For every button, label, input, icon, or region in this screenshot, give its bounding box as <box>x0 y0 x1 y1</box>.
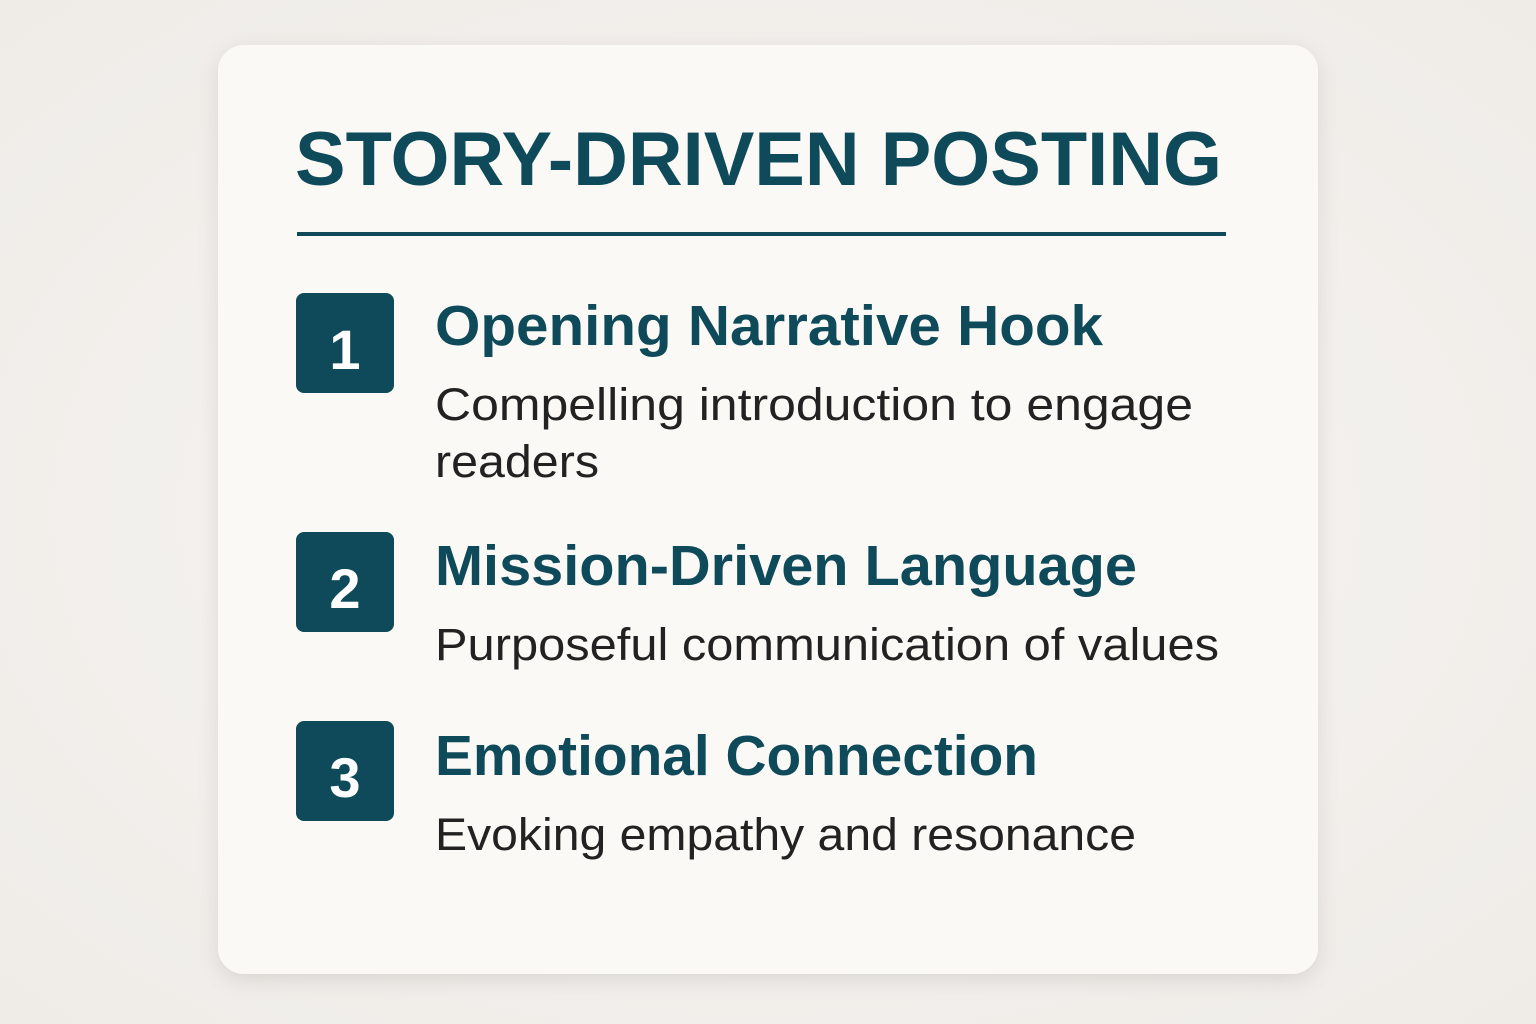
text block: description 1 <box>435 379 1193 487</box>
heading: Mission-Driven Language: Mission-Driven Language <box>435 534 1137 598</box>
icon: number badge 2: 2 <box>329 557 361 620</box>
icon: number badge 3: 3 <box>329 746 361 809</box>
item 3 <box>296 721 1136 860</box>
icon: number badge 3 <box>296 721 394 821</box>
heading: Opening Narrative Hook: Opening Narrative Hook <box>435 294 1103 358</box>
icon: number badge 1 <box>296 293 394 393</box>
icon: number badge 2 <box>296 532 394 632</box>
item 1 <box>296 293 1193 487</box>
heading: Emotional Connection: Emotional Connection <box>435 724 1038 788</box>
item 2 <box>296 532 1219 670</box>
icon: number badge 1: 1 <box>329 318 361 381</box>
text block: description 1: readers <box>435 436 599 487</box>
panel: card <box>218 45 1318 974</box>
text block: description 2: Purposeful communication of values <box>435 619 1219 670</box>
text block: description 1: Compelling introduction to engage <box>435 379 1193 430</box>
title: STORY-DRIVEN POSTING <box>295 117 1222 202</box>
text block: description 3: Evoking empathy and resonance <box>435 809 1136 860</box>
